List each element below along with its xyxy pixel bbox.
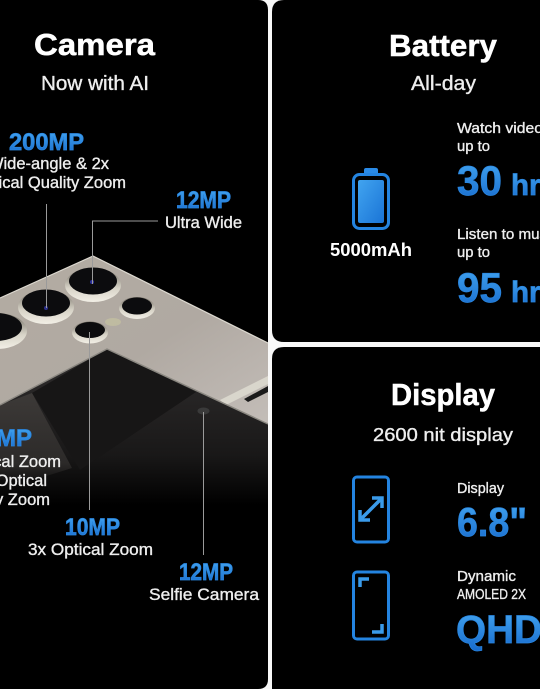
stat: panel type: Dynamic	[457, 569, 516, 585]
icon: phone with corner marks	[354, 572, 388, 639]
stat: video playback	[457, 120, 540, 204]
callout lines	[46, 204, 204, 555]
lens: left telephoto	[0, 313, 27, 349]
lens: ultra wide	[65, 268, 121, 302]
callout: 200MP	[0, 129, 126, 192]
callout: 12MP selfie: Selfie Camera	[149, 586, 260, 604]
lens: small right	[119, 297, 155, 319]
callout: 200MP: 200MP	[9, 129, 84, 156]
lens: 10MP	[72, 322, 108, 344]
phone back body	[0, 256, 268, 425]
callout: 12MP selfie: 12MP	[179, 559, 233, 586]
callout: 12MP selfie	[150, 562, 260, 600]
callout: 50MP	[0, 425, 61, 509]
callout: 10MP	[28, 514, 153, 559]
stat: display size: Display	[457, 481, 505, 497]
stat: music playback	[457, 226, 540, 311]
selfie camera hole	[198, 408, 210, 414]
panel: display	[272, 347, 540, 689]
stat: panel type	[456, 569, 540, 652]
callout: 12MP ultra wide: 12MP	[176, 187, 231, 214]
icon: phone with diagonal arrow	[354, 477, 388, 542]
s pen	[220, 376, 268, 405]
stat: music playback: 95	[457, 264, 502, 311]
flash	[105, 318, 121, 326]
stat: video playback: 30	[457, 157, 502, 204]
callout: 12MP ultra wide: Ultra Wide	[165, 214, 242, 232]
lens: main 200MP	[18, 290, 74, 324]
callout: 10MP: 3x Optical Zoom	[28, 541, 153, 559]
stat: display size	[457, 481, 527, 545]
stat: panel type: AMOLED 2X	[457, 587, 526, 603]
panel: camera	[0, 0, 268, 689]
callout: 12MP ultra wide	[166, 190, 242, 228]
stat: video playback: Watch video	[457, 120, 540, 137]
phone screen	[0, 356, 268, 488]
stat: video playback: up to	[457, 138, 490, 155]
panel: battery	[272, 0, 540, 342]
title: Camera: Camera	[34, 27, 156, 62]
subtitle: 2600 nit display: 2600 nit display	[373, 425, 513, 445]
phone illustration	[0, 256, 268, 510]
stat: display size: 6.8"	[457, 499, 527, 545]
callout: 10MP: 10MP	[65, 514, 120, 541]
subtitle: All-day: All-day	[411, 73, 476, 95]
icon: battery	[354, 168, 388, 228]
title: Display: Display	[391, 377, 496, 412]
stat: music playback: up to	[457, 244, 490, 261]
subtitle: Now with AI: Now with AI	[41, 73, 149, 95]
label: 5000mAh: 5000mAh	[330, 240, 412, 260]
title: Battery: Battery	[389, 28, 498, 63]
